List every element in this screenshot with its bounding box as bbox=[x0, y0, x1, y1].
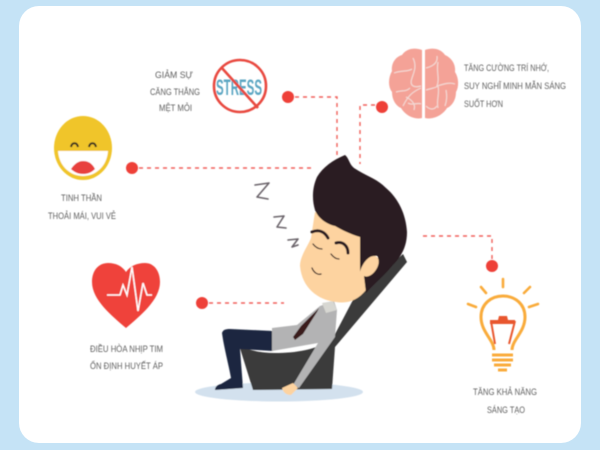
text: bulb caption: TĂNG KHẢ NĂNG bbox=[473, 386, 537, 398]
illustration group bbox=[48, 49, 566, 416]
icon: no stress sign bbox=[214, 60, 266, 112]
text: heart caption: ĐIỀU HÒA NHỊP TIM bbox=[90, 344, 163, 355]
text: bulb caption: SÁNG TẠO bbox=[487, 405, 525, 416]
tie bbox=[293, 308, 319, 340]
text: smile caption: TINH THẦN bbox=[61, 193, 102, 204]
text: smile caption bbox=[48, 193, 116, 222]
hair bbox=[313, 155, 407, 293]
collar bbox=[322, 301, 337, 313]
face bbox=[300, 212, 366, 302]
icon: light bulb bbox=[468, 279, 538, 370]
icon: sleep Z letters bbox=[255, 183, 298, 247]
icon: smiling face bbox=[54, 116, 112, 180]
text: brain caption: SUỐT HƠN bbox=[464, 98, 503, 110]
trousers and shoe bbox=[215, 329, 273, 390]
text: stress caption bbox=[150, 69, 200, 114]
connector: smile to person bbox=[126, 162, 313, 174]
text: stress caption: MỆT MỎI bbox=[159, 102, 192, 114]
closed eyes and smile bbox=[312, 244, 339, 274]
ear bbox=[360, 256, 379, 277]
text: heart caption: ỔN ĐỊNH HUYẾT ÁP bbox=[90, 360, 163, 372]
text: heart caption bbox=[90, 344, 163, 372]
icon: brain bbox=[389, 49, 458, 118]
icon: no stress sign: STRESS bbox=[216, 75, 262, 100]
text: brain caption: TĂNG CƯỜNG TRÍ NHỚ, bbox=[464, 63, 549, 74]
text: bulb caption bbox=[473, 386, 537, 416]
text: smile caption: THOẢI MÁI, VUI VẺ bbox=[48, 210, 116, 222]
text: stress caption: GIẢM SỰ bbox=[155, 69, 193, 81]
connector: heart to person bbox=[196, 297, 284, 309]
connector: stress to person bbox=[282, 91, 337, 156]
text: stress caption: CĂNG THẲNG bbox=[150, 86, 200, 98]
icon: heart with pulse bbox=[92, 263, 160, 328]
connector: bulb to person bbox=[423, 236, 498, 272]
chair bbox=[239, 254, 407, 390]
connector: brain to person bbox=[360, 101, 388, 164]
text: brain caption bbox=[464, 63, 566, 110]
hand bbox=[282, 383, 298, 395]
eyebrows bbox=[312, 231, 348, 253]
shirt and arm bbox=[272, 301, 337, 388]
floor shadow bbox=[195, 382, 363, 402]
text: brain caption: SUY NGHĨ MINH MẪN SÁNG bbox=[464, 80, 566, 92]
illustration: sleeping man in chair bbox=[195, 155, 407, 402]
